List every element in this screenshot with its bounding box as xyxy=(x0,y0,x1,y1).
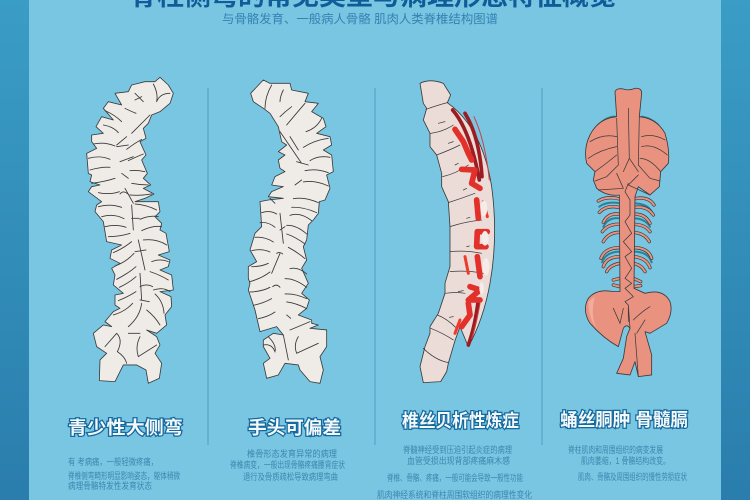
description 2: 椎骨形态发育异常的病理 xyxy=(247,448,337,459)
heading 3: 椎丝贝析性炼症 xyxy=(402,411,519,431)
heading 2: 手头可偏差 xyxy=(248,417,341,438)
description 1: 病理骨骼特发性发育状态 xyxy=(68,480,152,491)
right side band xyxy=(721,0,750,500)
spine 2 xyxy=(248,80,333,383)
description 3: 脊髓神经受到压迫引起炎症的病理 xyxy=(403,444,512,455)
heading 1: 青少性大侧弯 xyxy=(68,417,183,438)
description 1: 有 考病痛，一般轻微疼痛， xyxy=(68,456,158,467)
spine 3 with red lesions xyxy=(420,81,495,383)
white ovals xyxy=(479,200,489,294)
spine 4 muscles xyxy=(585,88,671,377)
divider 1 xyxy=(207,88,209,445)
left side band xyxy=(0,0,29,500)
description 1 xyxy=(68,456,180,491)
description 4: 脊柱肌肉和周围组织的病变发展 xyxy=(568,444,663,455)
rib shadows xyxy=(598,117,658,262)
red vessels xyxy=(453,110,489,345)
ribs xyxy=(598,198,654,287)
description 2: 退行及骨质疏松导致病理弯曲 xyxy=(243,471,338,482)
description 3: 血管受损出现背部疼痛麻木感 xyxy=(407,455,510,466)
description 2 xyxy=(230,448,345,482)
description 4 xyxy=(568,444,687,482)
divider 3 xyxy=(541,88,543,445)
description 1: 脊椎侧弯畸形明显影响姿态，躯体稍微 xyxy=(68,470,180,481)
description 3 xyxy=(377,444,532,500)
spine 1 xyxy=(87,77,173,383)
spine body xyxy=(585,88,671,377)
subtitle: 与骨骼发育、一般病人骨骼 肌肉人类脊椎结构图谱 xyxy=(222,11,498,26)
description 3: 脊椎、骨骼、疼痛，一般可能会导致一般性功能 xyxy=(387,472,523,483)
heading 4: 蛹丝胴肿 骨髓膈 xyxy=(560,410,688,430)
divider 2 xyxy=(374,88,376,445)
description 3: 肌肉神经系统和脊柱周围软组织的病理性变化 xyxy=(377,489,532,500)
description 4: 肌肉、骨骼及周围组织的慢性劳损症状 xyxy=(578,471,687,482)
description 4: 肌肉萎缩，1 骨骼结构改变。 xyxy=(581,455,670,466)
description 2: 脊椎病变，一般出现骨骼疼痛腰背症状 xyxy=(230,459,345,470)
